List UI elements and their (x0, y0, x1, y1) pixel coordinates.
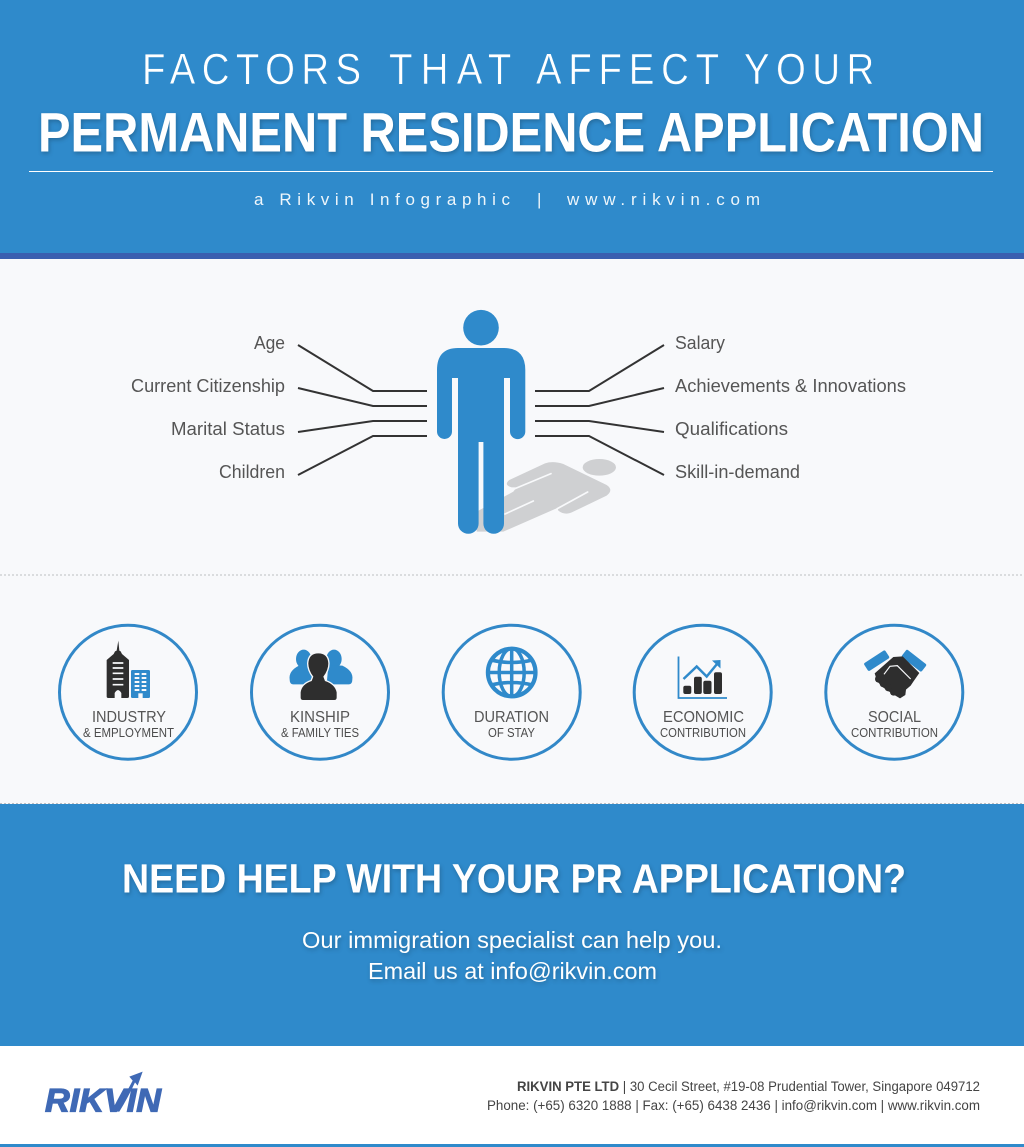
icon: growth chart (678, 656, 727, 698)
badge: economic contribution (634, 625, 771, 759)
badge label (660, 709, 746, 740)
badge label: DURATION (474, 709, 549, 726)
company contacts: Phone: (+65) 6320 1888 | Fax: (+65) 6438 2436 | info@rikvin.com | www.rikvin.com (487, 1098, 980, 1113)
badge: kinship and family ties (252, 625, 388, 759)
badge label: KINSHIP (290, 709, 350, 726)
panel: call to action (0, 804, 1024, 1046)
badge label (474, 709, 549, 740)
call to action heading: NEED HELP WITH YOUR PR APPLICATION? (122, 856, 906, 902)
badge label: ECONOMIC (663, 709, 744, 726)
badge: duration of stay (443, 625, 580, 759)
title line one: AFFECT (536, 45, 719, 94)
divider (0, 574, 1024, 576)
badge label: INDUSTRY (92, 709, 166, 726)
panel: badge row (60, 625, 963, 759)
right factor labels: Achievements & Innovations (675, 376, 906, 396)
icon: person shadow (477, 459, 616, 532)
badge label (281, 709, 359, 740)
badge label (83, 709, 174, 740)
icon: group of people (290, 650, 352, 700)
left factor labels: Age (254, 333, 285, 353)
title line one: YOUR (744, 45, 874, 94)
call to action text: Email us at info@rikvin.com (368, 958, 657, 984)
icon: person figure (437, 310, 525, 534)
icon: globe (488, 648, 536, 696)
call to action text: Our immigration specialist can help you. (302, 927, 722, 953)
badge: industry and employment (60, 625, 196, 759)
subtitle: a Rikvin Infographic (254, 190, 510, 209)
badge label (851, 709, 938, 740)
right factor labels (675, 333, 906, 482)
panel: personal factors diagram (131, 310, 906, 534)
badge label: OF STAY (488, 725, 535, 740)
badge label: SOCIAL (868, 709, 921, 726)
badge label: & FAMILY TIES (281, 725, 359, 740)
subtitle: www.rikvin.com (566, 190, 760, 209)
icon: handshake (864, 649, 927, 698)
right factor labels: Qualifications (675, 419, 788, 439)
badge label: CONTRIBUTION (660, 725, 746, 740)
company address: RIKVIN PTE LTD | 30 Cecil Street, #19-08 Prudential Tower, Singapore 049712 (517, 1079, 980, 1094)
left factor labels: Current Citizenship (131, 376, 285, 396)
badge: social contribution (826, 625, 963, 759)
right factor labels: Salary (675, 333, 725, 353)
subtitle: | (537, 190, 541, 209)
connector lines right (535, 345, 664, 475)
title line one (142, 45, 874, 94)
call to action text (302, 927, 722, 984)
left factor labels (131, 333, 285, 482)
icon: buildings (107, 641, 150, 698)
right factor labels: Skill-in-demand (675, 462, 800, 482)
title line one: THAT (389, 45, 511, 94)
left factor labels: Marital Status (171, 419, 285, 439)
badge label: CONTRIBUTION (851, 725, 938, 740)
subtitle (254, 190, 760, 209)
panel: header (0, 0, 1024, 259)
panel: footer (0, 1046, 1024, 1147)
connector lines left (298, 345, 427, 475)
title line one: FACTORS (142, 45, 361, 94)
left factor labels: Children (219, 462, 285, 482)
logo: Rikvin: RIKVIN (45, 1082, 162, 1118)
badge label: & EMPLOYMENT (83, 725, 174, 740)
